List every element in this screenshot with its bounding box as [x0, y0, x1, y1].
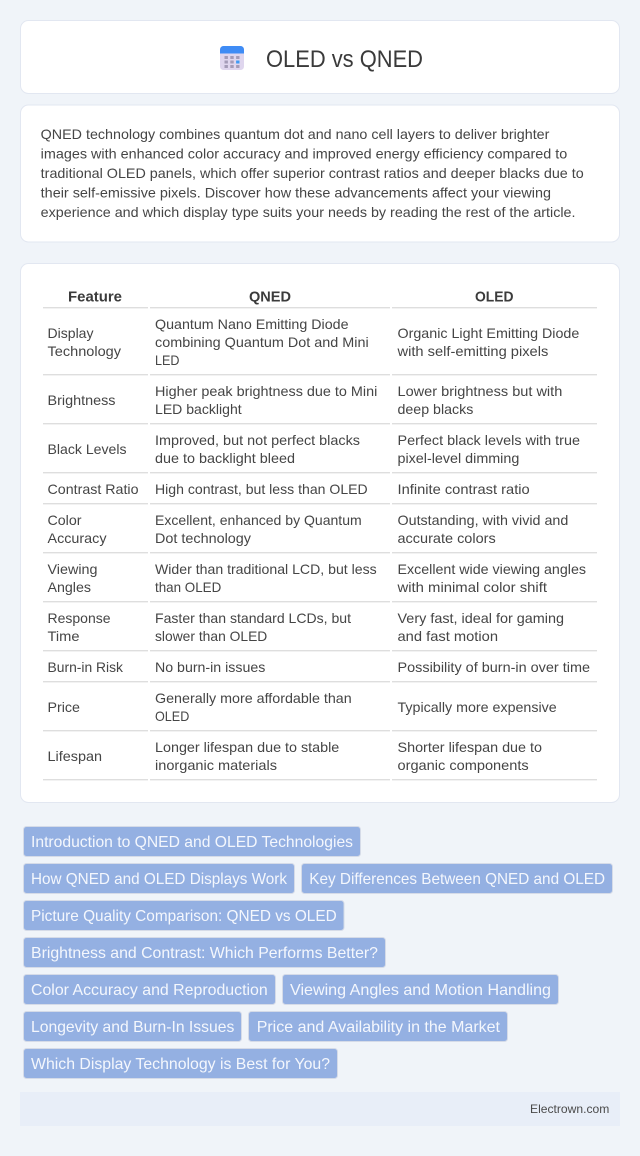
tag: price and availability: Price and Availability in the Market [257, 1019, 501, 1036]
tag: viewing angles: Viewing Angles and Motion Handling [290, 982, 551, 999]
row: viewing angles: with minimal color shift [396, 579, 547, 595]
tag: introduction: Introduction to QNED and OLED Technologies [31, 834, 353, 851]
row: brightness: deep blacks [398, 401, 473, 417]
row: contrast ratio: High contrast, but less than OLED [155, 481, 368, 497]
row: lifespan [48, 739, 542, 773]
panel: header [20, 20, 620, 94]
row: viewing angles: Viewing [48, 561, 98, 577]
text block: intro paragraph: experience and which display type suits your needs by reading the rest of the article. [41, 204, 575, 220]
row: color accuracy: Outstanding, with vivid and [398, 512, 568, 528]
footer credit: Electrown.com [530, 1102, 609, 1116]
row: lifespan: organic components [398, 757, 529, 773]
table header row: QNED [249, 288, 291, 306]
row: response time [48, 610, 564, 644]
row: viewing angles: Wider than traditional LCD, but less [155, 561, 377, 577]
row: viewing angles: Excellent wide viewing angles [398, 561, 586, 577]
row: black levels: pixel-level dimming [398, 450, 519, 466]
row: display technology: combining Quantum Dot and Mini [155, 334, 369, 350]
row: price [48, 690, 557, 724]
row: black levels: Improved, but not perfect blacks [155, 432, 360, 448]
row: price: Generally more affordable than [155, 690, 352, 706]
row: color accuracy: Color [48, 512, 82, 528]
row: contrast ratio [48, 481, 530, 497]
row: brightness [48, 383, 562, 417]
row: lifespan: Lifespan [48, 748, 102, 764]
row: display technology [48, 316, 580, 368]
text block: intro paragraph: traditional OLED panels, which offer superior contrast ratios and deeper blacks due to [41, 165, 584, 181]
tag: how displays work [24, 864, 294, 894]
row: viewing angles [48, 561, 586, 595]
tag: longevity: Longevity and Burn-In Issues [31, 1019, 234, 1036]
row: price: Price [48, 699, 80, 715]
row: black levels: due to backlight bleed [155, 450, 295, 466]
row: display technology: Technology [48, 343, 121, 359]
row: brightness: Brightness [48, 392, 116, 408]
row: burn-in risk [48, 659, 590, 675]
row: lifespan: Longer lifespan due to stable [155, 739, 340, 755]
row: display technology: Organic Light Emitting Diode [398, 325, 580, 341]
row: color accuracy: Excellent, enhanced by Quantum [155, 512, 362, 528]
row: lifespan: inorganic materials [155, 757, 277, 773]
tag: color accuracy: Color Accuracy and Reproduction [31, 982, 268, 999]
tag: picture quality: Picture Quality Comparison: QNED vs OLED [31, 908, 337, 925]
row: burn-in risk: Burn-in Risk [48, 659, 124, 675]
row: brightness: Lower brightness but with [398, 383, 562, 399]
row: response time: Faster than standard LCDs, but [155, 610, 351, 626]
text block: intro paragraph: QNED technology combines quantum dot and nano cell layers to deliver brighter [41, 126, 550, 142]
tag: best technology: Which Display Technology is Best for You? [31, 1056, 330, 1073]
row: color accuracy: accurate colors [398, 530, 496, 546]
row: price: Typically more expensive [398, 699, 557, 715]
text block: intro paragraph [41, 126, 584, 220]
row: response time: Very fast, ideal for gaming [398, 610, 564, 626]
table header row: Feature [68, 288, 122, 306]
tag: brightness and contrast [24, 938, 386, 968]
row: response time: Time [48, 628, 80, 644]
tag: best technology [24, 1048, 338, 1078]
row: brightness: LED backlight [155, 401, 242, 417]
row: response time: slower than OLED [155, 628, 267, 644]
tag: key differences [302, 864, 612, 894]
tag: longevity [24, 1012, 242, 1042]
table header row [68, 288, 514, 306]
row: viewing angles: Angles [48, 579, 91, 595]
text block: intro paragraph: their self-emissive pixels. Discover how these advancements affect your viewing [41, 184, 551, 200]
tag: key differences: Key Differences Between QNED and OLED [309, 871, 605, 888]
row: black levels: Perfect black levels with true [398, 432, 580, 448]
row: contrast ratio: Contrast Ratio [48, 481, 139, 497]
row: color accuracy: Accuracy [48, 530, 106, 546]
row: black levels [48, 432, 580, 466]
icon: calendar [220, 46, 244, 70]
row: response time: and fast motion [398, 628, 498, 644]
row: display technology: Quantum Nano Emitting Diode [155, 316, 349, 332]
row: black levels: Black Levels [48, 441, 126, 457]
tag: how displays work: How QNED and OLED Displays Work [31, 871, 288, 888]
row: viewing angles: than OLED [155, 579, 221, 595]
tag: color accuracy [24, 974, 276, 1004]
row: display technology: Display [48, 325, 94, 341]
row: color accuracy [48, 512, 568, 546]
row: burn-in risk: Possibility of burn-in over time [398, 659, 590, 675]
topic tags [24, 826, 612, 1078]
row: price: OLED [155, 708, 189, 724]
row: brightness: Higher peak brightness due to Mini [155, 383, 377, 399]
panel: comparison table [20, 264, 620, 802]
row: display technology: with self-emitting pixels [396, 343, 548, 359]
text block: intro paragraph: images with enhanced color accuracy and improved energy efficiency compared to [41, 146, 568, 162]
panel: introduction [20, 105, 620, 242]
row: display technology: LED [155, 352, 180, 368]
tag: viewing angles [282, 974, 558, 1004]
footer [20, 1092, 620, 1126]
tag: picture quality [24, 900, 344, 930]
tag: price and availability [248, 1012, 508, 1042]
title: OLED vs QNED [266, 46, 423, 73]
row: contrast ratio: Infinite contrast ratio [398, 481, 530, 497]
row: color accuracy: Dot technology [155, 530, 251, 546]
row: lifespan: Shorter lifespan due to [398, 739, 542, 755]
row: response time: Response [48, 610, 111, 626]
tag: brightness and contrast: Brightness and Contrast: Which Performs Better? [31, 945, 378, 962]
tag: introduction [24, 826, 360, 856]
table header row: OLED [475, 288, 514, 306]
row: burn-in risk: No burn-in issues [155, 659, 265, 675]
